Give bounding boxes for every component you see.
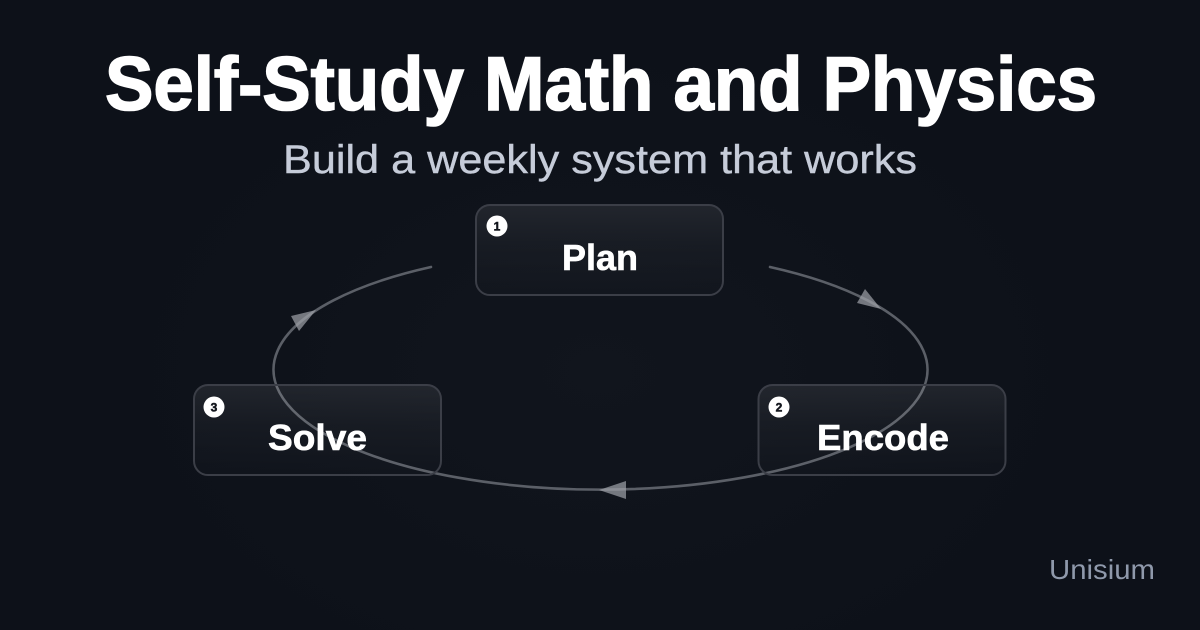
- badge 1: 1: [494, 220, 501, 234]
- title: Self-Study Math and Physics: [105, 42, 1097, 127]
- step card: Solve: [194, 385, 441, 475]
- badge 3: 3: [211, 400, 218, 414]
- arrow: encode to solve: [599, 481, 626, 499]
- cycle arc connecting the steps: [274, 267, 928, 490]
- step card: Plan: [476, 205, 723, 295]
- badge 2: 2: [776, 400, 783, 414]
- subtitle: Build a weekly system that works: [283, 138, 917, 182]
- label: Solve: Solve: [268, 417, 367, 458]
- badge 3: [204, 396, 224, 418]
- step card: Encode: [758, 385, 1006, 475]
- label: Encode: Encode: [817, 417, 949, 458]
- arrow: solve to plan: [291, 310, 316, 331]
- brand wordmark: Unisium: [1049, 554, 1155, 585]
- badge 2: [768, 396, 790, 418]
- badge 1: [486, 216, 508, 236]
- arrow: plan to encode: [857, 289, 881, 309]
- label: Plan: Plan: [562, 237, 638, 278]
